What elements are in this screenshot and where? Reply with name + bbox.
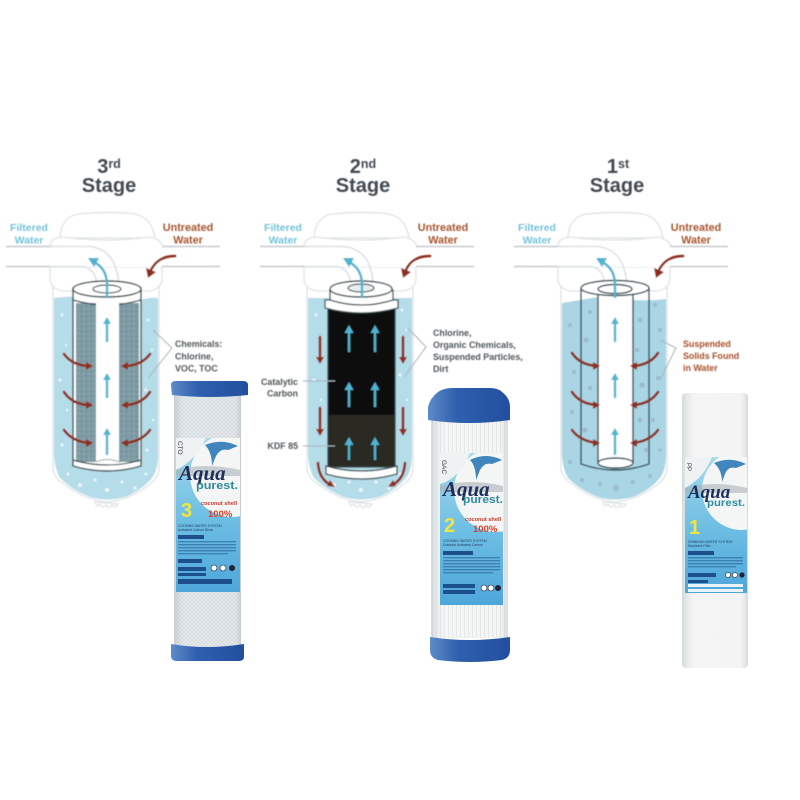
product label: Sediment Filter — [688, 544, 712, 548]
heading: 2nd Stage: nd — [361, 157, 376, 171]
label: filtered water: Filtered — [518, 222, 556, 234]
heading: 3rd Stage — [82, 156, 136, 197]
product label — [440, 453, 503, 605]
callout: suspended solids: Solids Found — [683, 351, 739, 361]
heading: 1st Stage: st — [618, 157, 630, 171]
callout: suspended solids: in Water — [683, 363, 718, 373]
water with suspended solids — [562, 297, 666, 500]
filter body — [682, 393, 748, 668]
product label: Aqua — [687, 482, 731, 503]
product label: GAC — [440, 460, 447, 474]
label: untreated water: Water — [428, 234, 459, 246]
label: filtered water: Water — [523, 234, 551, 246]
heading: 1st Stage: 1 — [607, 156, 618, 178]
water with speckles — [308, 298, 412, 500]
label: filtered water: Filtered — [264, 222, 302, 234]
cartridge — [325, 281, 398, 479]
product label — [176, 438, 240, 592]
label: KDF 85: KDF 85 — [267, 441, 298, 451]
product label: purest. — [463, 494, 503, 506]
heading: 2nd Stage: Stage — [336, 175, 390, 197]
top cap — [171, 381, 248, 397]
filter body — [431, 420, 508, 638]
label: filtered water: Water — [15, 234, 43, 246]
product label: coconut shell — [465, 517, 501, 523]
label: filtered water: Filtered — [10, 222, 48, 234]
label: untreated water: Water — [681, 234, 712, 246]
arrows: upward flow in core — [103, 317, 111, 455]
arrow: untreated water inflow — [401, 256, 430, 278]
water with speckles — [54, 297, 158, 500]
product label: PP — [685, 463, 691, 471]
product label: 100% — [208, 509, 233, 520]
product label: 100% — [473, 524, 498, 535]
product label: COOKING WATER SYSTEM — [178, 524, 222, 528]
product label: purest. — [707, 497, 745, 509]
housing — [6, 212, 220, 508]
product label — [685, 457, 747, 593]
label: untreated water: Water — [173, 234, 204, 246]
cartridge outline — [581, 280, 649, 470]
label: catalytic carbon: Carbon — [267, 388, 298, 398]
heading: 3rd Stage: rd — [108, 157, 121, 171]
product label: Aqua — [441, 477, 490, 501]
callout: suspended solids — [660, 339, 739, 380]
panel: stage 3 diagram — [6, 156, 222, 508]
label: untreated water: Untreated — [671, 222, 721, 234]
cartridge — [73, 281, 141, 471]
product label: Activated Carbon Block — [178, 528, 214, 532]
label: untreated water: Untreated — [163, 222, 213, 234]
filter body — [174, 390, 241, 652]
callout: chlorine and organics: Organic Chemicals, — [433, 340, 516, 350]
callout: chlorine and organics: Dirt — [433, 364, 448, 374]
product label: 1 — [689, 517, 700, 539]
product label: purest. — [196, 480, 238, 492]
callout: suspended solids: Suspended — [683, 339, 731, 349]
heading: 2nd Stage: 2 — [350, 156, 361, 178]
product label: coconut shell — [201, 501, 237, 507]
product label: Granular Activated Carbon — [443, 543, 483, 547]
product label: 2 — [444, 515, 455, 537]
top cap — [428, 388, 510, 423]
arrow: untreated water inflow — [654, 256, 683, 278]
product: CTO filter 3 — [171, 381, 248, 661]
housing — [260, 212, 474, 508]
housing — [514, 212, 728, 508]
product: GAC filter 2 — [428, 388, 510, 662]
arrow: filtered water outflow — [596, 258, 615, 298]
callout: chemicals: VOC, TOC — [175, 364, 218, 374]
product label: COOKING WATER SYSTEM — [443, 539, 487, 543]
panel: stage 1 diagram — [514, 156, 739, 508]
callout: chlorine and organics — [404, 328, 523, 377]
label: catalytic carbon: Catalytic — [261, 377, 298, 387]
arrows: upward flow in carbon — [344, 325, 380, 460]
product label: 3 — [181, 500, 192, 522]
heading: 1st Stage — [590, 156, 644, 197]
arrows: downward flow — [316, 337, 407, 487]
arrows: upward flow in core — [611, 317, 619, 455]
callout: chlorine and organics: Chlorine, — [433, 328, 471, 338]
heading: 1st Stage: Stage — [590, 175, 644, 197]
arrows: inward flow — [64, 354, 150, 447]
arrow: filtered water outflow — [343, 258, 362, 298]
product label: DRINKING WATER SYSTEM — [688, 540, 732, 544]
label: filtered water: Water — [269, 234, 297, 246]
label: catalytic carbon — [261, 377, 335, 398]
callout: chemicals: Chemicals: — [175, 339, 222, 349]
product label: CTO — [176, 441, 183, 455]
label: untreated water: Untreated — [418, 222, 468, 234]
product label: Aqua — [177, 461, 226, 485]
callout: chlorine and organics: Suspended Particles, — [433, 352, 523, 362]
bottom cap — [430, 637, 510, 662]
callout: chemicals — [148, 330, 222, 378]
arrows: inward flow — [572, 353, 658, 447]
arrow: untreated water inflow — [146, 256, 175, 278]
bottom cap — [171, 644, 244, 661]
heading: 3rd Stage: 3 — [97, 156, 108, 178]
panel: stage 2 diagram — [260, 156, 523, 508]
product: PP filter 1 — [682, 393, 748, 668]
heading: 2nd Stage — [336, 156, 390, 197]
callout: chemicals: Chlorine, — [175, 352, 213, 362]
label: KDF 85 — [267, 441, 335, 451]
heading: 3rd Stage: Stage — [82, 175, 136, 197]
arrow: filtered water outflow — [88, 258, 107, 298]
